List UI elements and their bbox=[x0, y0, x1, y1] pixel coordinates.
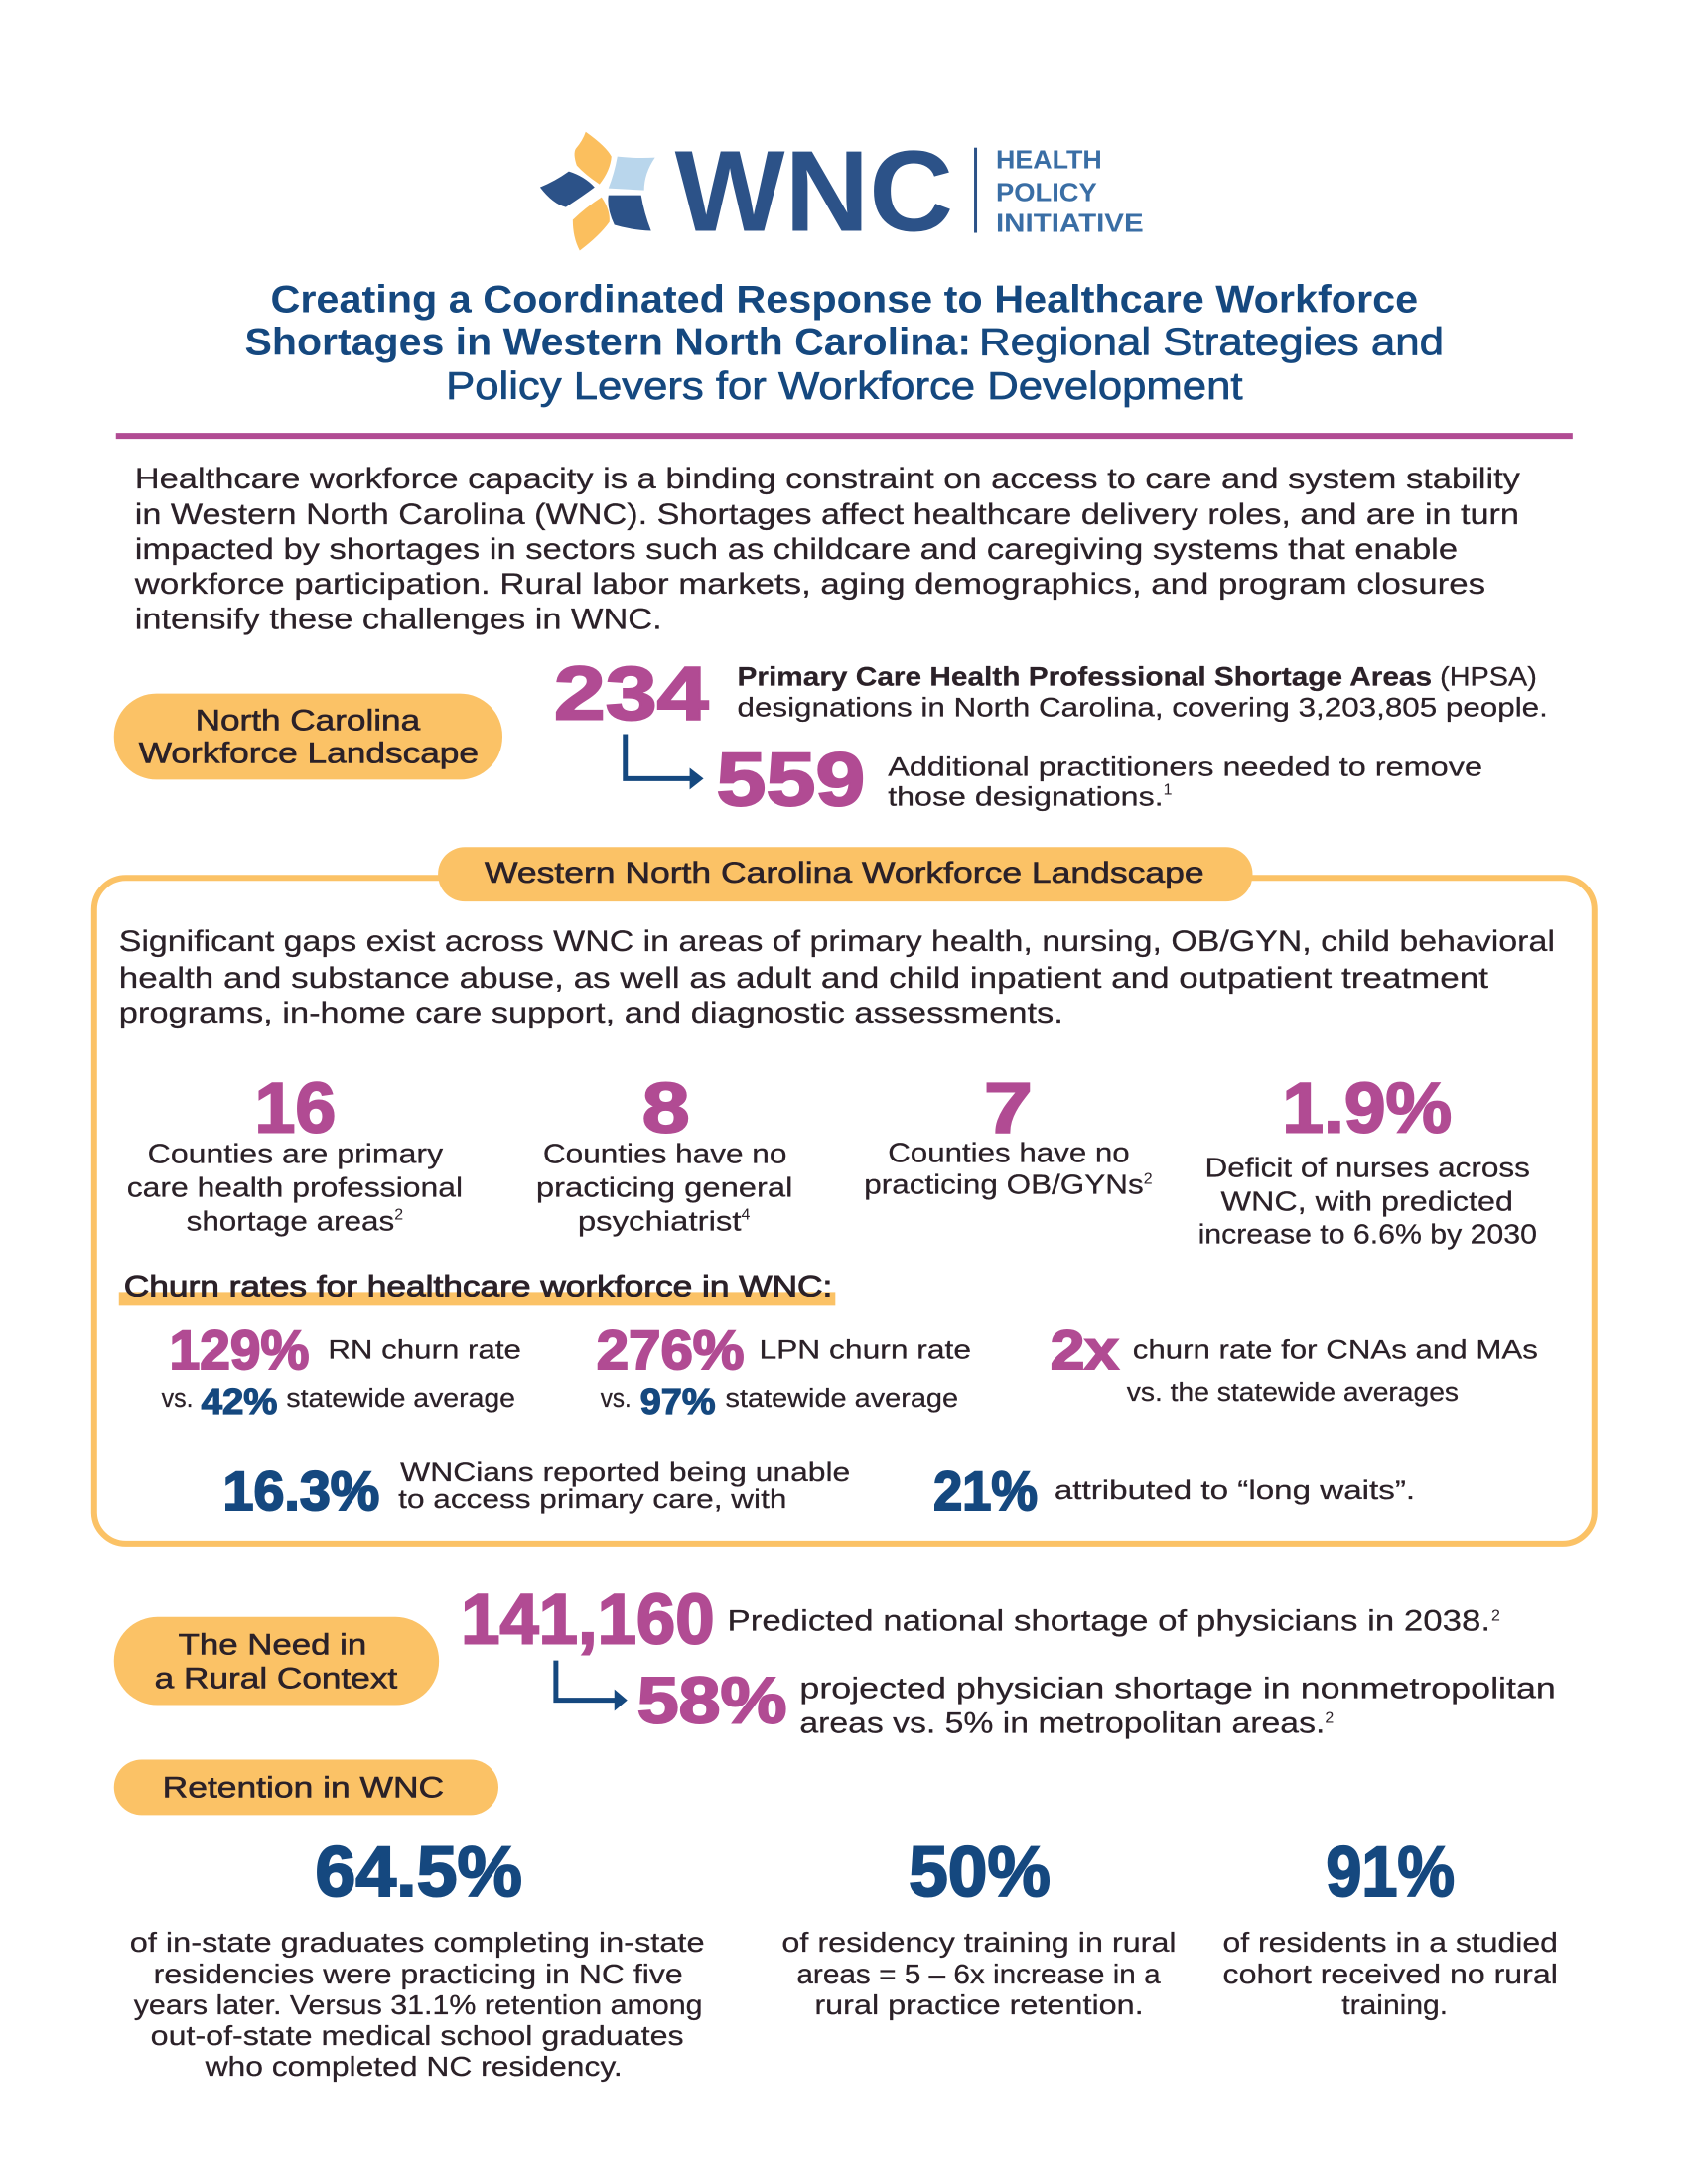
stat: 64.5% retention: residencies were practicing in NC five bbox=[154, 1959, 683, 1989]
stat: 7 counties bbox=[864, 1069, 1153, 1200]
stat: 1.9% nurses: 1.9% bbox=[1282, 1069, 1452, 1149]
stat: RN churn: 129% bbox=[170, 1318, 309, 1381]
title: Creating a Coordinated Response to Healthcare Workforce bbox=[270, 278, 1418, 321]
stat: 7 counties: 7 bbox=[984, 1069, 1033, 1149]
stat: 64.5% retention: years later. Versus 31.1% retention among bbox=[134, 1989, 703, 2020]
stat: 1.9% nurses bbox=[1198, 1069, 1537, 1249]
wordmark Health Policy Initiative bbox=[996, 147, 1144, 238]
arrow bbox=[626, 735, 704, 789]
stat: 21% long waits: 21% bbox=[933, 1459, 1038, 1522]
stat text: HPSA designations: designations in North Carolina, covering 3,203,805 people. bbox=[738, 693, 1548, 723]
logo: WNC Health Policy Initiative bbox=[540, 127, 1144, 256]
stat text: additional practitioners: 1 bbox=[1164, 781, 1173, 798]
stat: LPN churn bbox=[597, 1318, 971, 1422]
paragraph: significant gaps: Significant gaps exist across WNC in areas of primary health, nursing, OB/GYN, child behavioral bbox=[119, 925, 1555, 958]
intro paragraph bbox=[134, 463, 1520, 636]
stat: 16.3% unable to access: WNCians reported being unable bbox=[400, 1457, 850, 1487]
stat: 8 counties: practicing general bbox=[536, 1172, 792, 1203]
stat: LPN churn: 276% bbox=[597, 1318, 744, 1381]
stat: 21% long waits bbox=[933, 1459, 1415, 1522]
stat text: additional practitioners: Additional practitioners needed to remove bbox=[888, 751, 1482, 781]
stat text: HPSA designations: Primary Care Health Professional Shortage Areas bbox=[738, 662, 1432, 692]
stat: 50% rural training: rural practice retention. bbox=[814, 1989, 1144, 2020]
stat: 91% no rural training: cohort received no rural bbox=[1223, 1959, 1558, 1989]
stat: 16 counties: 2 bbox=[394, 1207, 403, 1224]
stat: 8 counties: psychiatrist bbox=[578, 1206, 742, 1237]
stat: 21% long waits: attributed to “long waits”. bbox=[1055, 1475, 1415, 1505]
stat text: nonmetropolitan bbox=[799, 1673, 1556, 1740]
pill heading: Retention in WNC: Retention in WNC bbox=[163, 1771, 444, 1804]
pill heading: The Need in a Rural Context bbox=[114, 1617, 439, 1706]
icon: flower mark bbox=[540, 132, 655, 250]
stat text: additional practitioners: those designations. bbox=[888, 781, 1164, 811]
stat: 64.5% retention: who completed NC residency. bbox=[204, 2051, 623, 2082]
pill heading: Retention in WNC bbox=[114, 1759, 498, 1815]
stat: 8 counties bbox=[536, 1069, 792, 1237]
panel: Western North Carolina workforce landscape bbox=[94, 847, 1595, 1544]
stat: 16 counties: Counties are primary bbox=[148, 1139, 443, 1169]
intro paragraph: intensify these challenges in WNC. bbox=[135, 604, 662, 636]
stat: RN churn: vs. bbox=[162, 1383, 194, 1413]
stat: RN churn bbox=[162, 1318, 521, 1422]
stat: 50% rural training: 50% bbox=[909, 1833, 1051, 1912]
stat: 7 counties: practicing OB/GYNs bbox=[864, 1169, 1144, 1200]
stat: 8 counties: Counties have no bbox=[543, 1139, 786, 1169]
stat text: additional practitioners bbox=[888, 751, 1482, 811]
stat: RN churn: RN churn rate bbox=[328, 1334, 521, 1364]
title: Regional Strategies and bbox=[979, 321, 1444, 363]
pill heading: North Carolina Workforce Landscape: Workforce Landscape bbox=[139, 737, 479, 769]
stat: 50% rural training bbox=[781, 1833, 1177, 2020]
pill heading: North Carolina Workforce Landscape bbox=[114, 694, 502, 779]
stat: 141,160: 141,160 bbox=[461, 1580, 715, 1660]
stat: 91% no rural training: 91% bbox=[1326, 1833, 1455, 1912]
wordmark Health Policy Initiative: POLICY bbox=[996, 180, 1097, 207]
stat text: national shortage: Predicted national shortage of physicians in 2038. bbox=[728, 1605, 1490, 1638]
stat text: HPSA designations: (HPSA) bbox=[1440, 662, 1537, 692]
stat text: nonmetropolitan: projected physician shortage in nonmetropolitan bbox=[799, 1673, 1556, 1706]
stat: 7 counties: Counties have no bbox=[888, 1138, 1130, 1168]
wordmark Health Policy Initiative: INITIATIVE bbox=[996, 210, 1144, 238]
paragraph: significant gaps bbox=[119, 925, 1555, 1029]
title: Shortages in Western North Carolina: bbox=[245, 321, 971, 363]
stat: 2x churn bbox=[1051, 1318, 1538, 1407]
stat: LPN churn: 97% bbox=[640, 1381, 716, 1422]
arrow bbox=[556, 1661, 628, 1711]
stat: LPN churn: statewide average bbox=[726, 1385, 958, 1413]
stat: 2x churn: churn rate for CNAs and MAs bbox=[1133, 1334, 1538, 1364]
pill heading: North Carolina Workforce Landscape: North Carolina bbox=[196, 705, 421, 738]
stat: RN churn: 42% bbox=[202, 1381, 277, 1422]
panel: the need in a rural context bbox=[114, 1580, 1556, 1740]
panel: North Carolina workforce landscape bbox=[114, 652, 1548, 822]
wordmark Health Policy Initiative: HEALTH bbox=[996, 147, 1102, 175]
stat: 64.5% retention: of in-state graduates completing in-state bbox=[130, 1927, 705, 1958]
stat: 16 counties: shortage areas bbox=[187, 1206, 394, 1237]
stat: 16.3% unable to access: 16.3% bbox=[223, 1459, 379, 1522]
stat: 50% rural training: areas = 5 – 6x increase in a bbox=[796, 1959, 1161, 1989]
stat: 234: 234 bbox=[554, 652, 709, 737]
stat: 64.5% retention bbox=[130, 1833, 705, 2082]
stat: 559: 559 bbox=[717, 738, 865, 822]
stat: 8 counties: 4 bbox=[742, 1207, 751, 1224]
stat: 7 counties: 2 bbox=[1144, 1171, 1153, 1188]
stat text: HPSA designations bbox=[738, 662, 1548, 723]
stat: 91% no rural training bbox=[1223, 1833, 1558, 2020]
stat: 16 counties: care health professional bbox=[127, 1172, 463, 1203]
stat: 16.3% unable to access: to access primary care, with bbox=[398, 1484, 786, 1514]
stat: LPN churn: vs. bbox=[601, 1385, 632, 1413]
stat: 64.5% retention: 64.5% bbox=[315, 1833, 522, 1912]
intro paragraph: in Western North Carolina (WNC). Shortages affect healthcare delivery roles, and are in turn bbox=[135, 498, 1519, 531]
stat: 16.3% unable to access bbox=[223, 1457, 850, 1522]
stat: 1.9% nurses: Deficit of nurses across bbox=[1205, 1153, 1530, 1183]
title: Policy Levers for Workforce Development bbox=[446, 365, 1243, 408]
stat: 91% no rural training: training. bbox=[1341, 1989, 1448, 2020]
panel: retention in WNC bbox=[114, 1759, 1558, 2082]
stat: 91% no rural training: of residents in a studied bbox=[1223, 1927, 1558, 1958]
stat: LPN churn: LPN churn rate bbox=[759, 1334, 971, 1364]
pill heading: The Need in a Rural Context: The Need in bbox=[179, 1629, 366, 1662]
stat: 50% rural training: of residency training in rural bbox=[781, 1927, 1177, 1958]
stat text: nonmetropolitan: 2 bbox=[1325, 1710, 1334, 1727]
intro paragraph: impacted by shortages in sectors such as childcare and caregiving systems that enable bbox=[135, 533, 1458, 566]
pill heading: Western North Carolina Workforce Landscape: Western North Carolina Workforce Landscape bbox=[485, 857, 1204, 889]
stat: 16 counties bbox=[127, 1069, 463, 1237]
pill heading: Western North Carolina Workforce Landscape bbox=[438, 847, 1252, 901]
intro paragraph: Healthcare workforce capacity is a binding constraint on access to care and system stability bbox=[135, 463, 1520, 495]
paragraph: significant gaps: programs, in-home care support, and diagnostic assessments. bbox=[119, 997, 1063, 1029]
paragraph: significant gaps: health and substance abuse, as well as adult and child inpatient and outpatient treatment bbox=[119, 962, 1489, 995]
stat text: nonmetropolitan: areas vs. 5% in metropolitan areas. bbox=[799, 1707, 1325, 1740]
stat: 2x churn: 2x bbox=[1051, 1318, 1119, 1381]
stat: 8 counties: 8 bbox=[642, 1069, 690, 1149]
title bbox=[245, 278, 1444, 408]
stat: RN churn: statewide average bbox=[286, 1385, 515, 1413]
stat: 16 counties: 16 bbox=[254, 1069, 336, 1149]
stat: 64.5% retention: out-of-state medical school graduates bbox=[151, 2020, 684, 2051]
intro paragraph: workforce participation. Rural labor markets, aging demographics, and program closures bbox=[134, 568, 1485, 601]
pill heading: The Need in a Rural Context: a Rural Context bbox=[155, 1663, 398, 1696]
stat: 2x churn: vs. the statewide averages bbox=[1127, 1379, 1459, 1407]
heading: churn rates: Churn rates for healthcare workforce in WNC: bbox=[124, 1270, 832, 1302]
wordmark WNC: WNC bbox=[675, 127, 953, 256]
stat: 1.9% nurses: increase to 6.6% by 2030 bbox=[1198, 1218, 1537, 1249]
stat: 1.9% nurses: WNC, with predicted bbox=[1221, 1186, 1513, 1217]
stat: 58%: 58% bbox=[637, 1664, 786, 1737]
stat text: national shortage: 2 bbox=[1491, 1608, 1500, 1625]
